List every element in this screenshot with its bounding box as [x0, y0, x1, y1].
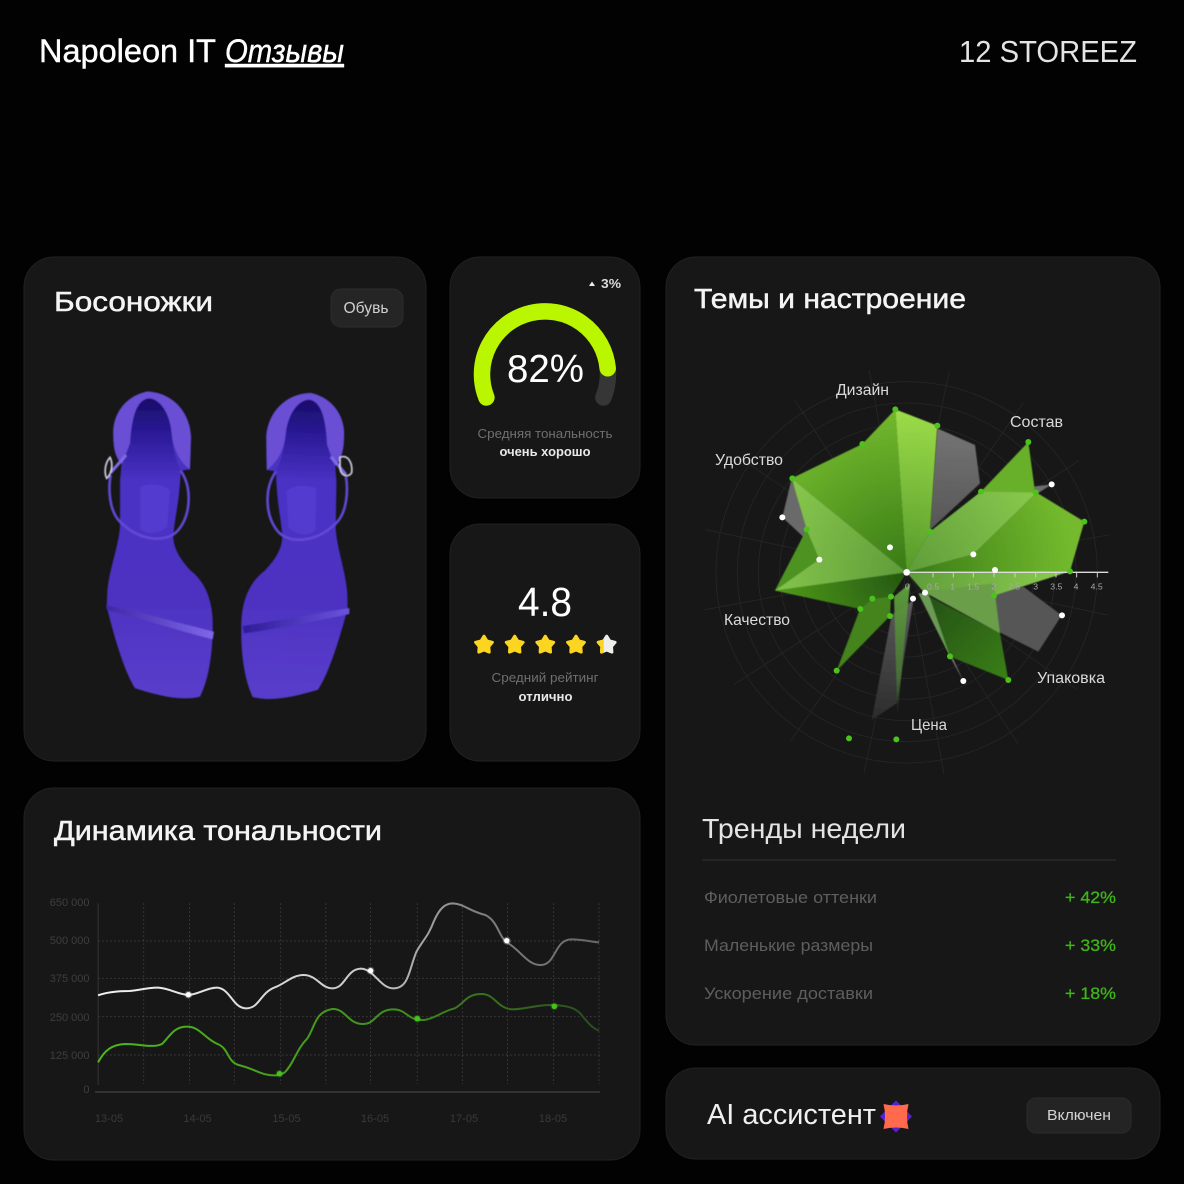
trend: small sizes [704, 936, 1116, 955]
gray series area [782, 428, 1062, 720]
left sandal [105, 392, 214, 698]
trend: small sizes: + 33% [1065, 936, 1116, 955]
radar category labels: Состав [1010, 414, 1063, 431]
y axis labels: 125 000 [50, 1050, 90, 1062]
image: purple sandals [105, 392, 352, 700]
gauge value: 82% [507, 348, 584, 391]
green series area [775, 409, 1084, 717]
assistant label: AI ассистент [707, 1099, 876, 1131]
green data points [789, 406, 1087, 742]
header title: Отзывы [225, 33, 344, 69]
brand logo: 12 STOREEZ [959, 34, 1137, 69]
panel: average rating [450, 524, 640, 761]
dynamics heading: Динамика тональности [54, 815, 382, 846]
product heading: Босоножки [54, 286, 213, 317]
rating verdict: отлично [518, 689, 573, 704]
x axis labels: 15-05 [272, 1113, 301, 1125]
trends heading: Тренды недели [702, 813, 906, 844]
radar category labels: Качество [724, 612, 790, 629]
radar axis: 4 [1074, 581, 1079, 591]
radar axis: 3 [1033, 581, 1038, 591]
trend: purple shades: Фиолетовые оттенки [704, 888, 877, 907]
radar axis: 2.5 [1008, 581, 1020, 591]
x axis labels: 17-05 [450, 1113, 478, 1125]
line chart [50, 897, 600, 1125]
y axis labels: 0 [83, 1084, 90, 1096]
trend: faster delivery: + 18% [1065, 984, 1116, 1003]
panel: themes and mood [666, 257, 1160, 1045]
x axis labels: 18-05 [539, 1113, 567, 1125]
right sandal [240, 392, 352, 700]
green series [98, 994, 599, 1075]
x axis labels: 13-05 [95, 1113, 123, 1125]
rating value: 4.8 [518, 579, 572, 625]
green markers [277, 1004, 557, 1076]
white series [98, 903, 599, 1008]
status button [1027, 1098, 1131, 1133]
panel: AI assistant [666, 1068, 1160, 1159]
header title [39, 33, 344, 69]
y axis labels: 250 000 [50, 1012, 90, 1024]
category button [331, 289, 403, 327]
gauge caption: Средняя тональность [478, 426, 613, 441]
panel: product [24, 257, 426, 761]
radar category labels [715, 382, 1105, 734]
radar chart [704, 370, 1109, 775]
gauge [482, 311, 608, 398]
x axis labels: 14-05 [183, 1113, 212, 1125]
x axis labels [95, 1113, 567, 1125]
radar axis: 1.5 [967, 581, 979, 591]
radar axis [905, 572, 1108, 591]
radar category labels: Удобство [715, 452, 783, 469]
x axis labels: 16-05 [361, 1113, 389, 1125]
rating caption: Средний рейтинг [492, 670, 599, 685]
white markers [186, 938, 509, 997]
radar axis: 1 [950, 581, 955, 591]
gauge verdict: очень хорошо [500, 444, 591, 459]
change indicator [589, 276, 621, 291]
panel: sentiment dynamics [24, 788, 640, 1160]
status button: Включен [1047, 1107, 1111, 1124]
category button: Обувь [344, 300, 388, 317]
radar axis: 0.5 [927, 581, 939, 591]
radar axis: 0 [905, 581, 910, 591]
themes heading: Темы и настроение [694, 283, 966, 314]
panel: average sentiment [450, 257, 640, 498]
y axis labels: 650 000 [50, 897, 90, 909]
icon: AI star [880, 1100, 912, 1132]
y axis labels [50, 897, 90, 1096]
header title: Napoleon IT [39, 33, 216, 69]
rating stars [476, 636, 615, 652]
radar category labels: Дизайн [836, 382, 889, 399]
radar axis: 2 [991, 581, 996, 591]
radar axis: 3.5 [1050, 581, 1063, 591]
trend: small sizes: Маленькие размеры [704, 936, 873, 955]
trend: purple shades [704, 888, 1116, 907]
white data points [779, 481, 1065, 684]
y axis labels: 375 000 [50, 973, 90, 985]
change indicator: 3% [601, 276, 621, 291]
trend: faster delivery [704, 984, 1116, 1003]
y axis labels: 500 000 [50, 935, 90, 947]
trend: faster delivery: Ускорение доставки [704, 984, 873, 1003]
radar category labels: Цена [911, 717, 947, 734]
trend: purple shades: + 42% [1065, 888, 1116, 907]
radar axis: 4.5 [1091, 581, 1103, 591]
radar category labels: Упаковка [1037, 670, 1105, 687]
